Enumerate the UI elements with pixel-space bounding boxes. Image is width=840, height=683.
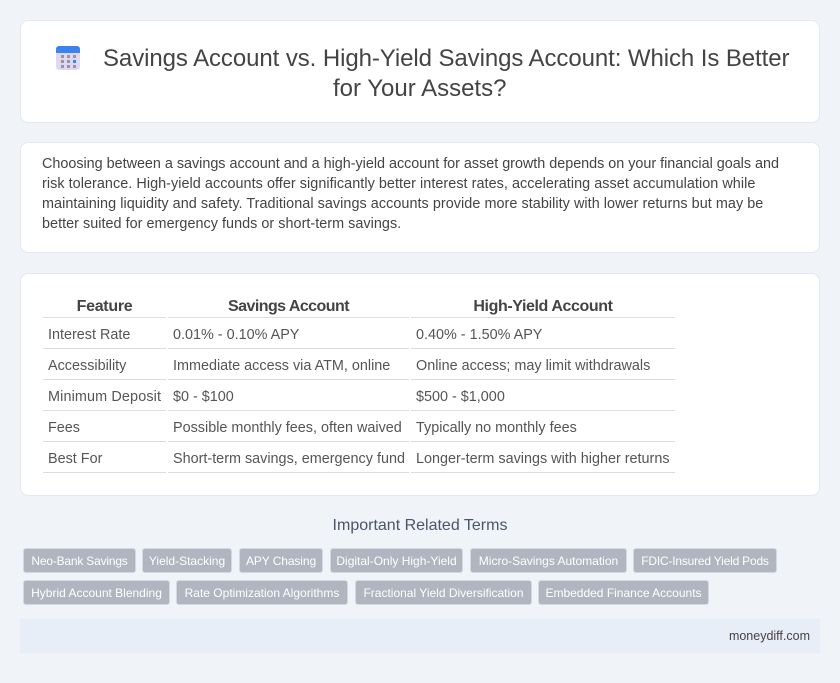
intro text: risk tolerance. High-yield accounts offer significantly better interest rates, accelerating asset accumulation while (42, 176, 755, 192)
comparison table: $0 - $100 (173, 389, 234, 405)
panel: intro card (20, 142, 820, 253)
intro text: Choosing between a savings account and a high-yield account for asset growth depends on your financial goals and (42, 156, 779, 172)
tags: related terms (23, 548, 777, 605)
panel: comparison table card (20, 273, 820, 496)
tags: related terms: APY Chasing (246, 554, 316, 568)
comparison table (43, 298, 675, 473)
tags: related terms: FDIC-Insured Yield Pods (641, 554, 769, 568)
comparison table: Feature (77, 298, 132, 315)
comparison table: Possible monthly fees, often waived (173, 420, 402, 436)
comparison table: 0.01% - 0.10% APY (173, 327, 299, 343)
comparison table: Accessibility (48, 358, 126, 374)
tags: related terms: Hybrid Account Blending (31, 586, 162, 600)
comparison table: Fees (48, 420, 80, 436)
footer bar (20, 619, 820, 653)
title: for Your Assets? (333, 75, 506, 102)
tags: related terms: Yield-Stacking (149, 554, 225, 568)
comparison table: Longer-term savings with higher returns (416, 451, 670, 467)
title: Savings Account vs. High-Yield Savings Account: Which Is Better (103, 45, 789, 72)
comparison table: 0.40% - 1.50% APY (416, 327, 542, 343)
tags: related terms: Embedded Finance Accounts (545, 586, 702, 600)
comparison table: Best For (48, 451, 102, 467)
tags: related terms: Neo-Bank Savings (31, 554, 128, 568)
tags: related terms: Digital-Only High-Yield (336, 554, 457, 568)
comparison table: Immediate access via ATM, online (173, 358, 390, 374)
comparison table: Online access; may limit withdrawals (416, 358, 650, 374)
panel: title card (20, 20, 820, 123)
intro text: maintaining liquidity and safety. Traditional savings accounts provide more stability with lower returns but may be (42, 196, 763, 212)
comparison table: Savings Account (228, 298, 349, 315)
comparison table: Short-term savings, emergency fund (173, 451, 405, 467)
comparison table: High-Yield Account (473, 298, 613, 315)
icon: calendar (56, 46, 80, 70)
intro text (42, 156, 779, 232)
heading: related terms: Important Related Terms (333, 517, 507, 534)
comparison table: $500 - $1,000 (416, 389, 505, 405)
tags: related terms: Micro-Savings Automation (479, 554, 618, 568)
title (103, 45, 790, 102)
comparison table: Typically no monthly fees (416, 420, 577, 436)
footer text: moneydiff.com (729, 629, 810, 643)
comparison table: Interest Rate (48, 327, 130, 343)
tags: related terms: Fractional Yield Diversification (363, 586, 524, 600)
intro text: better suited for emergency funds or short-term savings. (42, 216, 401, 232)
comparison table: Minimum Deposit (48, 389, 161, 405)
tags: related terms: Rate Optimization Algorithms (185, 586, 339, 600)
